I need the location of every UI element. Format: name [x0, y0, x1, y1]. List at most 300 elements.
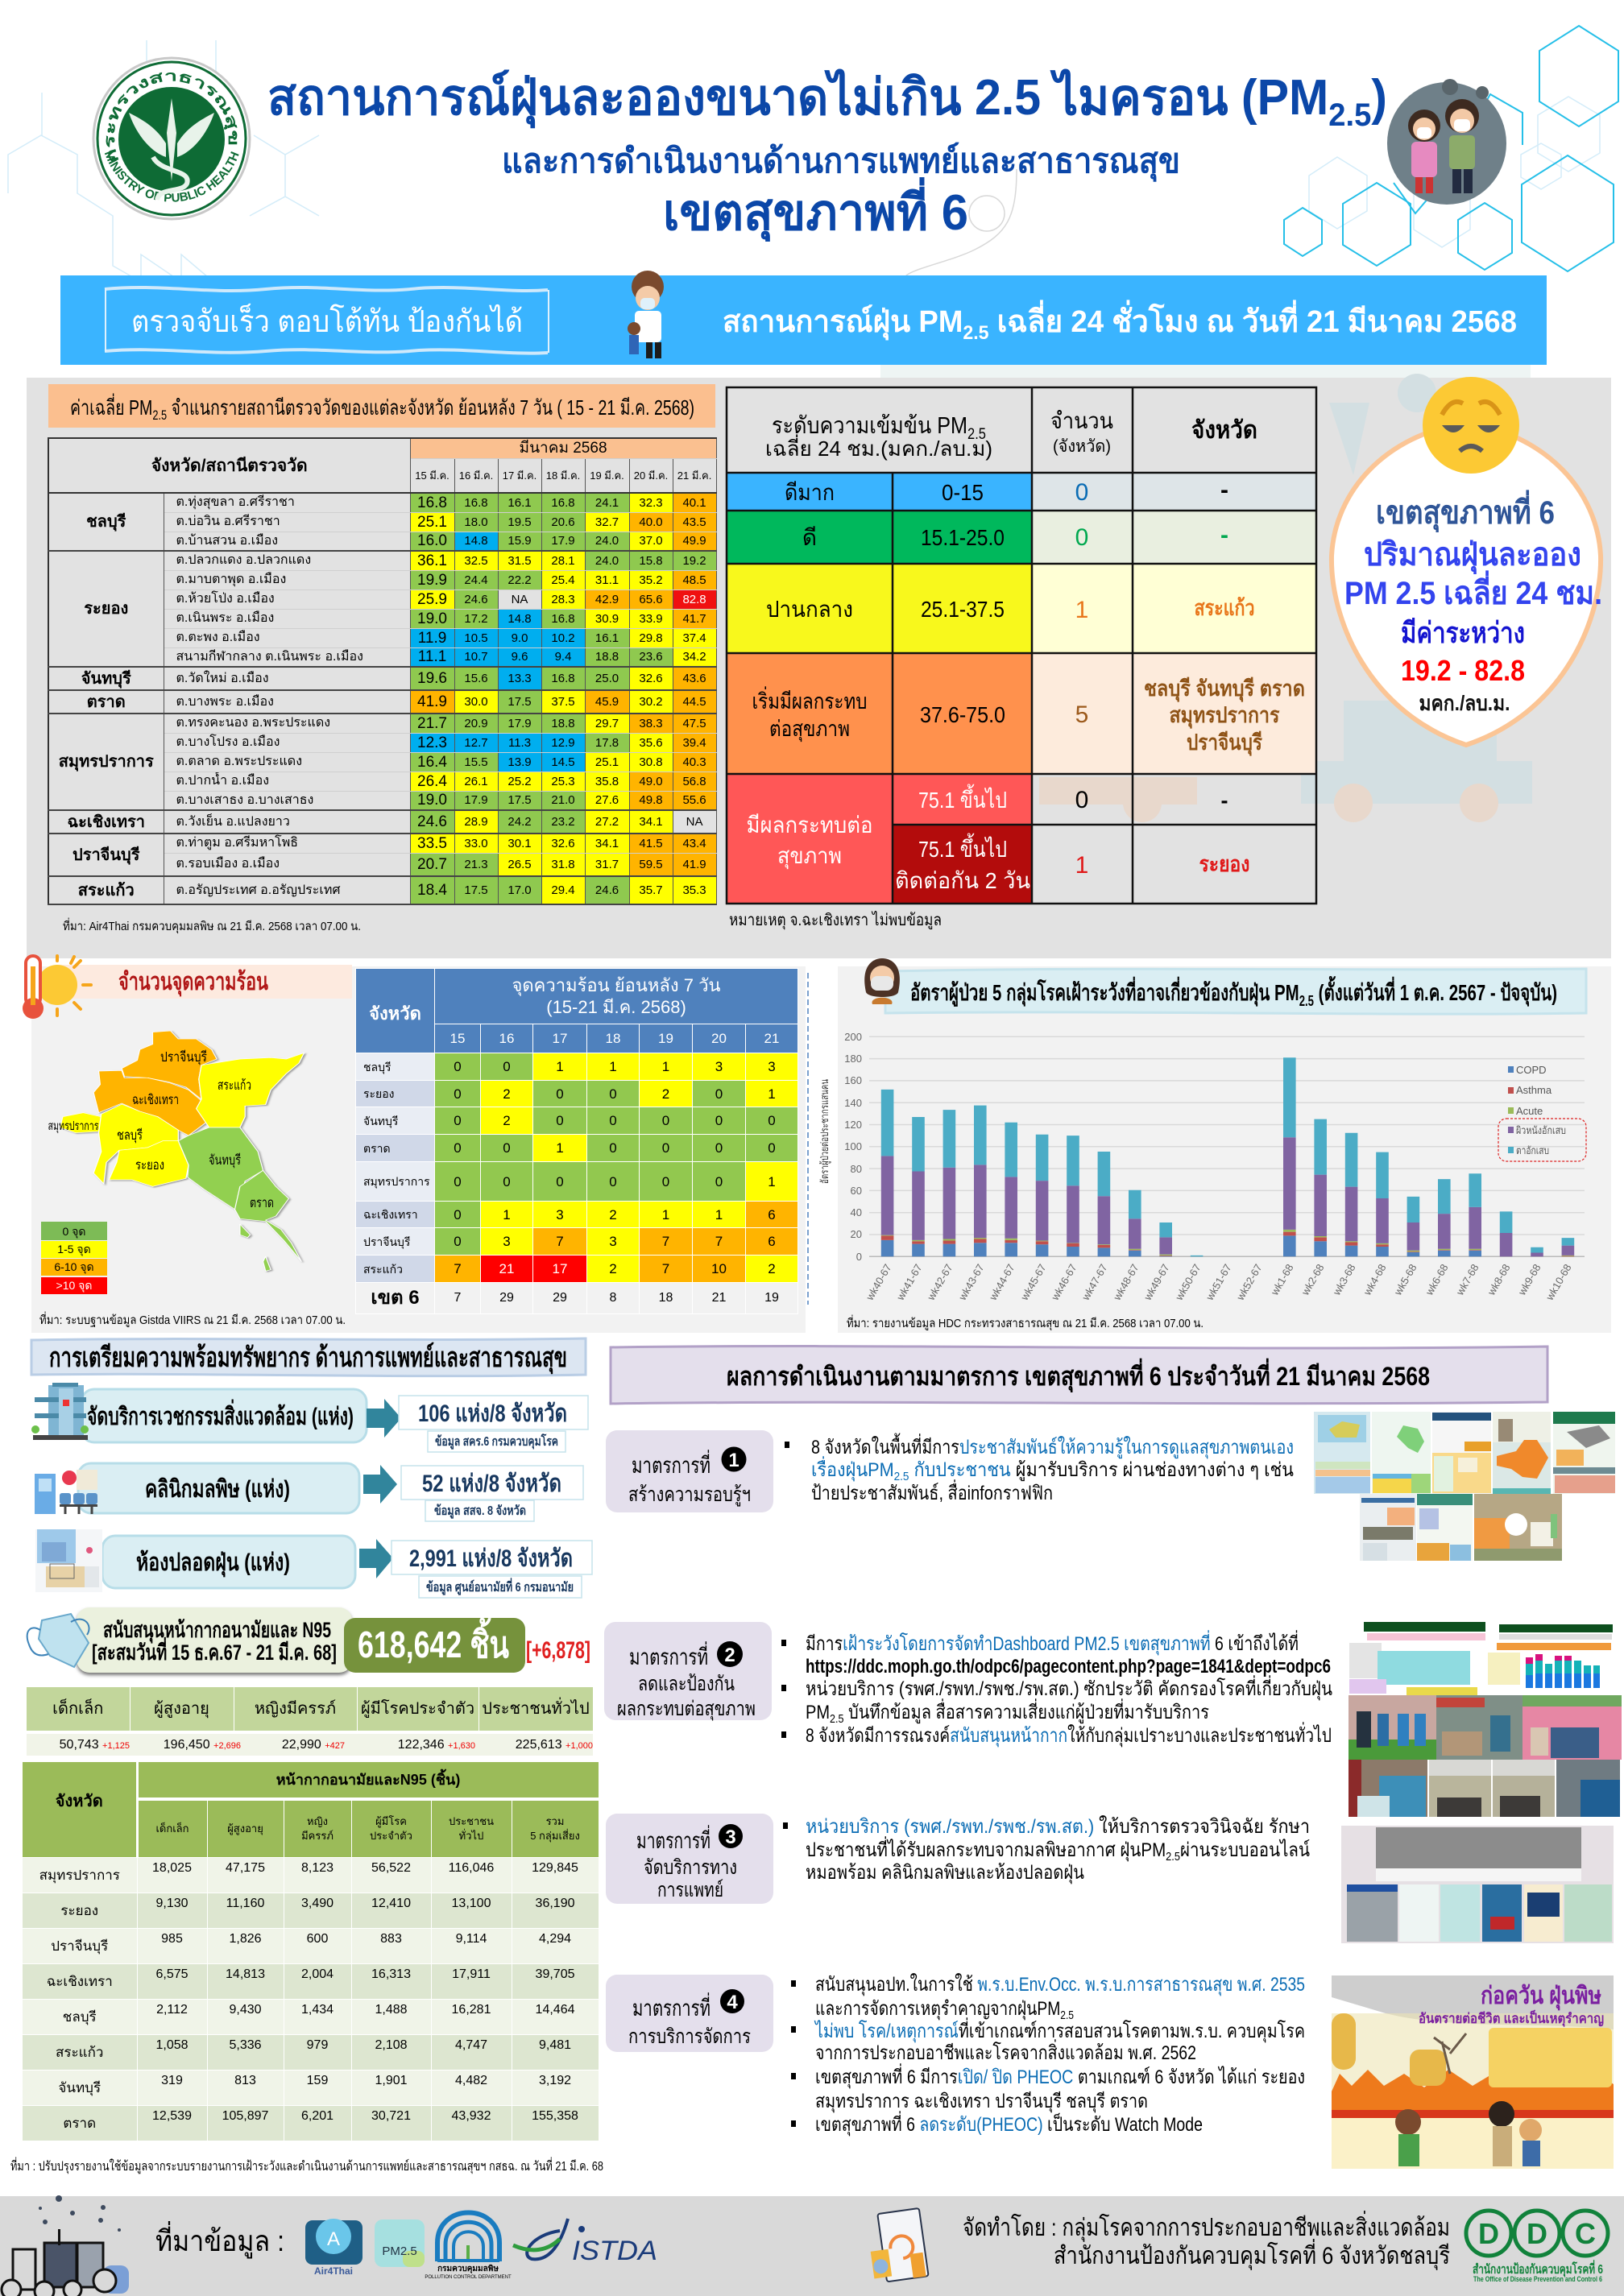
- chart legend: ตาอักเสบ: [1516, 1144, 1549, 1156]
- logo: Pollution Control Department: กรมควบคุมมลพิษ: [437, 2264, 499, 2273]
- table: PM2.5 by station: 22.2: [508, 573, 532, 586]
- table: PM2.5 by station: 32.6: [639, 672, 663, 685]
- table: hotspots by province: 29: [553, 1291, 567, 1305]
- table: PM2.5 by station: 16.8: [551, 496, 575, 510]
- table: masks by province: 4,482: [455, 2073, 487, 2087]
- table: PM2.5 by station: 18.8: [551, 717, 575, 730]
- table: PM2.5 by station: ต.บางโปรง อ.เมือง: [176, 735, 280, 749]
- table: hotspots by province: 7: [662, 1261, 669, 1276]
- x-axis week labels: wk48-67: [1111, 1262, 1141, 1303]
- measure 1: สร้างความรอบรู้ฯ: [628, 1483, 751, 1507]
- table: PM2.5 by station: 43.4: [682, 837, 706, 850]
- table: masks by province: 3,192: [539, 2073, 571, 2087]
- table: hotspots by province: 0: [454, 1174, 462, 1189]
- table: PM2.5 by station: 24.6: [464, 593, 488, 606]
- table 2: PM2.5 concentration levels: สุขภาพ: [777, 843, 842, 870]
- table: PM2.5 by station: 25.4: [551, 573, 575, 586]
- table: hotspots by province: 2: [662, 1086, 669, 1102]
- table: masks by province: 14,464: [536, 2002, 574, 2017]
- table: masks by group: ผู้มีโรคประจำตัว: [361, 1700, 474, 1718]
- table: PM2.5 by station: 15.6: [464, 672, 488, 685]
- chart legend: Acute: [1516, 1105, 1543, 1117]
- mask support card: [สะสมวันที่ 15 ธ.ค.67 - 21 มี.ค. 68]: [92, 1636, 337, 1665]
- table 2: PM2.5 concentration levels: ปราจีนบุรี: [1187, 730, 1262, 756]
- table: masks by province: 9,130: [155, 1896, 188, 1910]
- row: environmental medicine: จัดบริการเวชกรรมสิ่งแวดล้อม (แห่ง): [87, 1399, 354, 1430]
- logo: DDC: D: [1527, 2217, 1547, 2250]
- mask support card: สนับสนุนหน้ากากอนามัยและ N95: [103, 1618, 331, 1644]
- x-axis week labels: wk50-67: [1173, 1262, 1204, 1303]
- logo: GISTDA: ISTDA: [572, 2236, 657, 2266]
- measure 3 text: ประชาชนที่ได้รับผลกระทบจากมลพิษอากาศ ฝุ่นPM: [806, 1839, 1228, 1861]
- measure 3: 3: [725, 1826, 736, 1848]
- data source: ข้อมูล ศูนย์อนามัยที่ 6 กรมอนามัย: [426, 1578, 574, 1596]
- table: PM2.5 by station: 35.2: [639, 573, 663, 586]
- table: hotspots by province: 1: [662, 1059, 669, 1074]
- table: masks by province: 1,058: [155, 2037, 188, 2052]
- callout: region 6 PM2.5 range: เขตสุขภาพที่ 6: [1376, 490, 1555, 533]
- logo: Pollution Control Department: POLLUTION CONTROL DEPARTMENT: [425, 2275, 512, 2280]
- table: PM2.5 by station: 41.9: [417, 693, 447, 710]
- title: และการดำเนินงานด้านการแพทย์และสาธารณสุข: [502, 142, 1180, 182]
- table: PM2.5 by station: 34.1: [595, 837, 619, 850]
- table: PM2.5 by station: 24.4: [464, 573, 488, 586]
- measure 2 text: https://ddc.moph.go.th/odpc6/pagecontent.php?page=1841&dept=odpc6: [806, 1656, 1331, 1678]
- table: PM2.5 by station: จันทบุรี: [81, 670, 131, 688]
- value: 2,991 places: 2,991 แห่ง/8 จังหวัด: [409, 1545, 573, 1572]
- table: PM2.5 by station: 30.0: [464, 695, 488, 709]
- table: hotspots by province: 3: [503, 1234, 511, 1249]
- measure 2: [604, 1622, 772, 1721]
- resources heading: การเตรียมความพร้อมทรัพยากร ด้านการแพทย์และสาธารณสุข: [49, 1342, 567, 1375]
- table: masks by province: 6,201: [301, 2108, 334, 2123]
- x-axis week labels: wk45-67: [1018, 1262, 1049, 1303]
- table: masks by province: ประจำตัว: [370, 1830, 412, 1842]
- table: PM2.5 by station: 15.8: [639, 554, 663, 568]
- table: masks by province: ฉะเชิงเทรา: [47, 1973, 113, 1989]
- table: hotspots by province: 18: [659, 1291, 673, 1305]
- table: PM2.5 by station: ต.ปลวกแดง อ.ปลวกแดง: [176, 553, 311, 567]
- map: provinces of health region 6: ปราจีนบุรี: [160, 1049, 207, 1065]
- logo: Ministry of Public Health: [92, 56, 251, 221]
- table: PM2.5 by station: 17.2: [464, 612, 488, 625]
- table: PM2.5 by station: NA: [512, 593, 528, 606]
- table: PM2.5 by station: ต.เนินพระ อ.เมือง: [176, 611, 274, 625]
- table: PM2.5 by station: ต.ห้วยโป่ง อ.เมือง: [176, 592, 275, 606]
- table: PM2.5 by station: 31.8: [551, 858, 575, 871]
- title: ): [1371, 70, 1387, 126]
- table: PM2.5 by station: 17 มี.ค.: [503, 470, 536, 482]
- table: hotspots by province: 0: [454, 1140, 462, 1156]
- table: PM2.5 by station: 24.0: [595, 554, 619, 568]
- measure 2: ลดและป้องกัน: [638, 1673, 735, 1695]
- logo: PM2.5: PM2.5: [382, 2244, 417, 2258]
- x-axis week labels: wk51-67: [1204, 1262, 1234, 1303]
- table: hotspots by province: 7: [715, 1234, 723, 1249]
- table: hotspots by province: 1: [768, 1174, 776, 1189]
- table: hotspots by province: 19: [764, 1291, 779, 1305]
- table 2: PM2.5 concentration levels: 15.1-25.0: [921, 525, 1005, 550]
- x-axis week labels: wk44-67: [987, 1262, 1017, 1303]
- table: hotspots by province: 6: [768, 1234, 776, 1249]
- table: PM2.5 by station: 17.9: [551, 534, 575, 548]
- chart gridlines and axis: 100: [844, 1140, 862, 1152]
- table: masks by province: สระแก้ว: [56, 2044, 103, 2060]
- table: PM2.5 by station: 16.8: [417, 494, 447, 511]
- source note: Air4Thai: ที่มา: Air4Thai กรมควบคุมมลพิษ ณ 21 มี.ค. 2568 เวลา 07.00 น.: [63, 917, 361, 934]
- table: PM2.5 by station: สมุทรปราการ: [59, 753, 154, 771]
- table: PM2.5 by station: ฉะเชิงเทรา: [67, 813, 145, 831]
- table: PM2.5 by station: 27.2: [595, 815, 619, 829]
- map: provinces of health region 6: ตราด: [250, 1195, 274, 1210]
- table: masks by province: 17,911: [452, 1967, 491, 1981]
- table: hotspots by province: จันทบุรี: [363, 1115, 398, 1127]
- table: PM2.5 by station: 19.6: [417, 670, 447, 687]
- table: PM2.5 by station: 20.7: [417, 856, 447, 873]
- map: provinces of health region 6: ระยอง: [135, 1157, 164, 1173]
- measure 1 text: เรื่องฝุ่นPM: [811, 1456, 894, 1482]
- table: hotspots by province: 2: [768, 1261, 776, 1276]
- table: PM2.5 by station: 41.7: [682, 612, 706, 625]
- data source: [428, 1431, 566, 1452]
- table: masks by group: ผู้สูงอายุ: [154, 1700, 209, 1718]
- table: masks by province: 13,100: [452, 1896, 491, 1910]
- table: masks by province: 319: [161, 2073, 183, 2087]
- table: PM2.5 by station: 35.3: [682, 883, 706, 897]
- table: PM2.5 by station: NA: [686, 815, 702, 829]
- table: PM2.5 by station: ต.รอบเมือง อ.เมือง: [176, 857, 280, 871]
- table: hotspots by province: 17: [553, 1261, 567, 1276]
- table: hotspots by province: สมุทรปราการ: [363, 1175, 430, 1188]
- table: PM2.5 by station: 21 มี.ค.: [677, 470, 711, 482]
- table: hotspots by province: 0: [454, 1206, 462, 1222]
- table: PM2.5 by station: สระแก้ว: [78, 881, 135, 899]
- table: PM2.5 by station: 11.9: [418, 630, 446, 646]
- x-axis week labels: wk3-68: [1330, 1262, 1358, 1298]
- measure 1: [606, 1430, 773, 1512]
- table: PM2.5 by station: 12.7: [464, 736, 488, 749]
- table: hotspots by province: 7: [454, 1291, 461, 1305]
- measure 1 text: 8 จังหวัดในพื้นที่มีการประชาสัมพันธ์ให้ความรู้ในการดูแลสุขภาพตนเอง: [811, 1433, 1294, 1459]
- table 2: PM2.5 concentration levels: (จังหวัด): [1053, 437, 1111, 456]
- table: PM2.5 by station: 32.7: [595, 515, 619, 528]
- table: PM2.5 by station: 32.3: [639, 496, 663, 510]
- table: PM2.5 by station: 16.4: [417, 754, 447, 770]
- table: hotspots by province: 15: [450, 1031, 465, 1046]
- table: PM2.5 by station: 23.2: [551, 815, 575, 829]
- table: masks by province: รวม: [546, 1815, 564, 1827]
- table: PM2.5 by station: 48.5: [682, 573, 706, 586]
- table: masks by province: 1,434: [301, 2002, 334, 2017]
- table: PM2.5 by station: 18.0: [464, 515, 488, 528]
- table: PM2.5 by station: 34.2: [682, 650, 706, 664]
- arrow: [359, 1539, 393, 1578]
- x-axis week labels: wk40-67: [864, 1262, 894, 1303]
- map: provinces of health region 6: จันทบุรี: [209, 1152, 241, 1169]
- map: provinces of health region 6: [48, 1031, 304, 1271]
- table: PM2.5 by station: 19.2: [682, 554, 706, 568]
- table: hotspots by province: (15-21 มี.ค. 2568): [546, 997, 686, 1017]
- table: hotspots by province: สระแก้ว: [363, 1263, 403, 1276]
- logo: PM2.5: [375, 2219, 425, 2267]
- table: hotspots by province: 2: [609, 1206, 617, 1222]
- table 2: PM2.5 concentration levels: ดีมาก: [785, 480, 835, 505]
- table: PM2.5 by station: 25.2: [508, 775, 532, 788]
- measure 2 text: มีการเฝ้าระวังโดยการจัดทำDashboard PM2.5 เขตสุขภาพที่ 6 เข้าถึงได้ที่: [806, 1630, 1299, 1656]
- x-axis week labels: wk9-68: [1515, 1262, 1543, 1298]
- table 2: PM2.5 concentration levels: ชลบุรี จันทบุรี ตราด: [1144, 676, 1305, 702]
- table: PM2.5 by station: 38.3: [639, 717, 663, 730]
- icon: clean room: [35, 1529, 102, 1592]
- table 2: PM2.5 concentration levels: เฉลี่ย 24 ชม.(มคก./ลบ.ม): [765, 434, 992, 461]
- table: PM2.5 by station: ต.ทรงคะนอง อ.พระประแดง: [176, 716, 330, 730]
- table: PM2.5 by station: 10.2: [551, 631, 575, 644]
- map legend: 6-10 จุด: [54, 1260, 94, 1274]
- table: PM2.5 by station: 19.9: [417, 572, 447, 588]
- table: PM2.5 by station: 19.0: [417, 792, 447, 809]
- table: hotspots by province: 0: [662, 1174, 669, 1189]
- table: hotspots by province: 7: [662, 1234, 669, 1249]
- callout: region 6 PM2.5 range: มคก./ลบ.ม.: [1419, 691, 1510, 715]
- table 2: PM2.5 concentration levels: 1: [1075, 852, 1088, 879]
- table: masks by group: 50,743 +1,125: [60, 1738, 130, 1751]
- chart legend: [1498, 1064, 1586, 1161]
- slogan box: [105, 288, 549, 354]
- organiser text: สำนักงานป้องกันควบคุมโรคที่ 6 จังหวัดชลบุรี: [1054, 2239, 1450, 2271]
- measure 4 text: เขตสุขภาพที่ 6 ลดระดับ(PHEOC) เป็นระดับ Watch Mode: [815, 2111, 1203, 2137]
- table: masks by province: ผู้มีโรค: [375, 1815, 407, 1827]
- table: hotspots by province: 17: [553, 1031, 567, 1046]
- table: PM2.5 by station: 17.9: [508, 717, 532, 730]
- table: hotspots by province: 21: [712, 1291, 726, 1305]
- table: PM2.5 by station: 47.5: [682, 717, 706, 730]
- measure 2 text: บันทึกข้อมูล สื่อสารความเสี่ยงแก่ผู้ป่วยที่มารับบริการ: [843, 1698, 1209, 1724]
- table: PM2.5 by station: 40.3: [682, 755, 706, 768]
- measure 4 text: สมุทรปราการ ฉะเชิงเทรา ปราจีนบุรี ชลบุรี ตราด: [815, 2091, 1148, 2113]
- chart gridlines and axis: [844, 1031, 1585, 1263]
- table: masks by province: [23, 1762, 599, 2141]
- table: PM2.5 by station: 23.6: [639, 650, 663, 664]
- table: PM2.5 by station: 33.0: [464, 837, 488, 850]
- table: hotspots by province: 0: [715, 1174, 723, 1189]
- x-axis week labels: wk49-67: [1141, 1262, 1172, 1303]
- table 2: PM2.5 concentration levels: เริ่มมีผลกระทบ: [752, 686, 867, 714]
- total masks: [344, 1617, 525, 1673]
- table: hotspots by province: 0: [503, 1059, 511, 1074]
- table: hotspots by province: 0: [768, 1140, 776, 1156]
- chart legend: Asthma: [1516, 1084, 1552, 1096]
- table: masks by group: [27, 1687, 593, 1756]
- table: hotspots by province: 3: [609, 1234, 617, 1249]
- table: hotspots by province: 7: [454, 1261, 462, 1276]
- table: masks by province: หญิง: [307, 1815, 328, 1827]
- table: hotspots by province: 21: [764, 1031, 779, 1046]
- measure 4 text: สนับสนุนอปท.ในการใช้ พ.ร.บ.Env.Occ. พ.ร.บ.การสาธารณสุข พ.ศ. 2535: [815, 1973, 1305, 1996]
- table: PM2.5 by station: 15.5: [464, 755, 488, 768]
- table: PM2.5 by station: 26.1: [464, 775, 488, 788]
- table: hotspots by province: 10: [711, 1261, 727, 1276]
- x-axis week labels: wk5-68: [1391, 1262, 1419, 1298]
- table: PM2.5 by station: [48, 437, 717, 905]
- table: PM2.5 by station: ต.บางพระ อ.เมือง: [176, 694, 274, 709]
- table: PM2.5 by station: 16.8: [464, 496, 488, 510]
- table: PM2.5 by station: 30.9: [595, 612, 619, 625]
- measure 3 text: หน่วยบริการ (รพศ./รพท./รพช./รพ.สต.) ให้บริการตรวจวินิจฉัย รักษา: [806, 1815, 1310, 1838]
- table: masks by group: ประชาชนทั่วไป: [482, 1700, 590, 1718]
- table 2: PM2.5 concentration levels: -: [1220, 522, 1228, 548]
- table: masks by group: 225,613 +1,000: [516, 1738, 593, 1751]
- table: PM2.5 by station: 29.7: [595, 717, 619, 730]
- table 2: PM2.5 concentration levels: 75.1 ขึ้นไป: [918, 784, 1007, 813]
- table: PM2.5 by station: จังหวัด/สถานีตรวจวัด: [151, 456, 308, 475]
- table: PM2.5 by station: ระยอง: [84, 600, 128, 618]
- table: PM2.5 by station: 14.8: [464, 534, 488, 548]
- table: PM2.5 by station: 26.4: [417, 773, 447, 789]
- source note: GISTDA: ที่มา: ระบบฐานข้อมูล Gistda VIIRS ณ 21 มี.ค. 2568 เวลา 07.00 น.: [39, 1311, 346, 1327]
- table 2: PM2.5 concentration levels: 0: [1075, 787, 1088, 813]
- chart gridlines and axis: 180: [844, 1053, 862, 1065]
- table: PM2.5 by station: 17.5: [508, 793, 532, 807]
- table: PM2.5 by station: 15.9: [508, 534, 532, 548]
- table: PM2.5 by station: 11.3: [508, 736, 531, 749]
- table: PM2.5 by station: 45.9: [595, 695, 619, 709]
- table: PM2.5 by station: 20.6: [551, 515, 575, 528]
- measure 2 text: 8 จังหวัดมีการรณรงค์สนับสนุนหน้ากากให้กับกลุ่มเปราะบางและประชาชนทั่วไป: [806, 1722, 1332, 1748]
- footer: [0, 2195, 1624, 2296]
- table: masks by province: 813: [234, 2073, 256, 2087]
- header decorations: [7, 24, 1619, 275]
- table: PM2.5 by station: 10.7: [464, 650, 488, 664]
- table: PM2.5 by station: 30.1: [508, 837, 532, 850]
- logo: Ministry of Public Health: MINISTRY OF PUBLIC HEALTH: [105, 151, 239, 202]
- table: masks by province: ตราด: [63, 2115, 96, 2131]
- table: PM2.5 by station: 16.8: [551, 672, 575, 685]
- measure 2 text: หน่วยบริการ (รพศ./รพท./รพช./รพ.สต.) ซักประวัติ คัดกรองโรคที่เกี่ยวกับฝุ่น: [806, 1675, 1332, 1701]
- table: masks by province: 12,410: [371, 1896, 411, 1910]
- table: hotspots by province: 3: [715, 1059, 723, 1074]
- table: masks by province: 16,313: [371, 1967, 411, 1981]
- callout: region 6 PM2.5 range: มีค่าระหว่าง: [1401, 616, 1525, 649]
- table: PM2.5 by station: 25.1: [417, 514, 447, 530]
- table: hotspots by province: 0: [454, 1059, 462, 1074]
- source note: report: ที่มา : ปรับปรุงรายงานใช้ข้อมูลจากระบบรายงานการเฝ้าระวังและดำเนินงานด้านการแพทย์และสาธารณสุขฯ กสธฉ. ณ วันที่ 21 มี.ค. 68: [10, 2157, 603, 2174]
- panel: hotspots: [23, 954, 1611, 1333]
- table 2: PM2.5 concentration levels: 37.6-75.0: [920, 702, 1005, 727]
- table: hotspots by province: 18: [606, 1031, 620, 1046]
- table: PM2.5 by station: 35.7: [639, 883, 663, 897]
- table: masks by province: 8,123: [301, 1860, 334, 1875]
- panel: PM2.5 station table background: [27, 365, 1611, 958]
- table: PM2.5 by station: 24.1: [595, 496, 619, 510]
- resources heading: [31, 1338, 586, 1376]
- table: PM2.5 by station: 30.8: [639, 755, 663, 768]
- row: dust-free room: [35, 1529, 592, 1598]
- table: masks by province: 9,430: [229, 2002, 262, 2017]
- table: masks by province: จังหวัด: [56, 1793, 103, 1810]
- table: PM2.5 by station: 19.5: [508, 515, 532, 528]
- table: PM2.5 by station: 16.8: [551, 612, 575, 625]
- table: masks by province: 6,575: [155, 1967, 188, 1981]
- table: PM2.5 by station: 20.9: [464, 717, 488, 730]
- callout: region 6 PM2.5 range: 19.2 - 82.8: [1401, 654, 1525, 687]
- table: PM2.5 by station: ต.ตะพง อ.เมือง: [176, 631, 260, 644]
- heading: PM2.5 stations: [70, 393, 694, 423]
- table: masks by province: 9,114: [456, 1931, 487, 1946]
- table: PM2.5 by station: 44.5: [682, 695, 706, 709]
- table 2: PM2.5 concentration levels: 75.1 ขึ้นไป: [918, 833, 1007, 862]
- measure 4 text: เขตสุขภาพที่ 6 มีการเปิด/ ปิด PHEOC ตามเกณฑ์ 6 จังหวัด ได้แก่ ระยอง: [815, 2063, 1305, 2089]
- table: PM2.5 by station: 43.5: [682, 515, 706, 528]
- table: PM2.5 by station: 20 มี.ค.: [634, 470, 668, 482]
- image: smoke dust poster: อันตรายต่อชีวิต และเป็นเหตุรำคาญ: [1419, 2008, 1604, 2027]
- chart gridlines and axis: 120: [844, 1119, 862, 1131]
- note: no data for Chachoengsao: หมายเหตุ จ.ฉะเชิงเทรา ไม่พบข้อมูล: [729, 911, 942, 930]
- table: PM2.5 by station: 49.9: [682, 534, 706, 548]
- table: hotspots by province: 19: [658, 1031, 673, 1046]
- table: PM2.5 by station: 13.3: [508, 672, 532, 685]
- table 2: PM2.5 concentration levels: ต่อสุขภาพ: [769, 717, 850, 743]
- table: hotspots by province: 0: [609, 1086, 617, 1102]
- table: PM2.5 by station: สนามกีฬากลาง ต.เนินพระ อ.เมือง: [176, 650, 363, 664]
- measure 3 text: 2.5: [1166, 1850, 1180, 1864]
- table: hotspots by province: ชลบุรี: [363, 1060, 392, 1073]
- table: PM2.5 by station: 33.5: [417, 835, 447, 852]
- icon: data analysis: [865, 2208, 929, 2283]
- table: masks by province: 56,522: [371, 1860, 411, 1875]
- x-axis week labels: [864, 1262, 1574, 1303]
- table: masks by group: 22,990 +427: [282, 1738, 345, 1751]
- table: masks by province: 2,004: [301, 1967, 334, 1981]
- table: PM2.5 by station: ปราจีนบุรี: [72, 846, 140, 863]
- table: masks by province: 3,490: [301, 1896, 334, 1910]
- table: hotspots by province: ฉะเชิงเทรา: [363, 1208, 418, 1221]
- table: masks by province: มีครรภ์: [301, 1830, 334, 1842]
- icon: N95 mask: [27, 1614, 89, 1667]
- table: hotspots by province: 20: [711, 1031, 727, 1046]
- table: masks by group: หญิงมีครรภ์: [255, 1700, 336, 1718]
- table: masks by province: จันทบุรี: [58, 2079, 101, 2095]
- icon: sun and thermometer: [23, 956, 91, 1019]
- title: เขตสุขภาพที่ 6: [663, 177, 968, 242]
- table 2: PM2.5 concentration levels: สมุทรปราการ: [1170, 703, 1280, 729]
- table: hotspots by province: เขต 6: [371, 1287, 420, 1309]
- table: masks by province: 2,108: [375, 2037, 408, 2052]
- row: environmental medicine: [31, 1383, 588, 1452]
- measure 2 text: PM: [806, 1702, 835, 1723]
- table: PM2.5 by station: 16 มี.ค.: [459, 470, 493, 482]
- chart gridlines and axis: 60: [851, 1185, 862, 1197]
- measure 4: การบริการจัดการ: [628, 2025, 751, 2048]
- data source: [425, 1500, 534, 1521]
- table: PM2.5 by station: 24.6: [595, 883, 619, 897]
- chart gridlines and axis: 0: [856, 1251, 862, 1263]
- icon: sad face: [1423, 377, 1519, 474]
- table: PM2.5 by station: ต.ทุ่งสุขลา อ.ศรีราชา: [176, 495, 295, 509]
- source heading: ที่มาข้อมูล :: [155, 2221, 284, 2259]
- table: masks by province: 14,813: [226, 1967, 265, 1981]
- row: dust-free room: ห้องปลอดฝุ่น (แห่ง): [136, 1549, 290, 1578]
- measure 4: [606, 1975, 773, 2052]
- logo: Air4Thai: [305, 2219, 362, 2277]
- table 2: PM2.5 concentration levels: ระดับความเข้มข้น PM: [772, 413, 997, 439]
- table: PM2.5 by station: 35.6: [639, 736, 663, 749]
- table: PM2.5 by station: 13.9: [508, 755, 532, 768]
- stacked bars: [888, 1057, 1568, 1256]
- table 2: PM2.5 concentration levels: 1: [1075, 597, 1088, 623]
- chart legend: ผิวหนังอักเสบ: [1516, 1124, 1566, 1136]
- table: masks by province: ปราจีนบุรี: [51, 1938, 108, 1954]
- table: PM2.5 by station: 25.9: [417, 591, 447, 607]
